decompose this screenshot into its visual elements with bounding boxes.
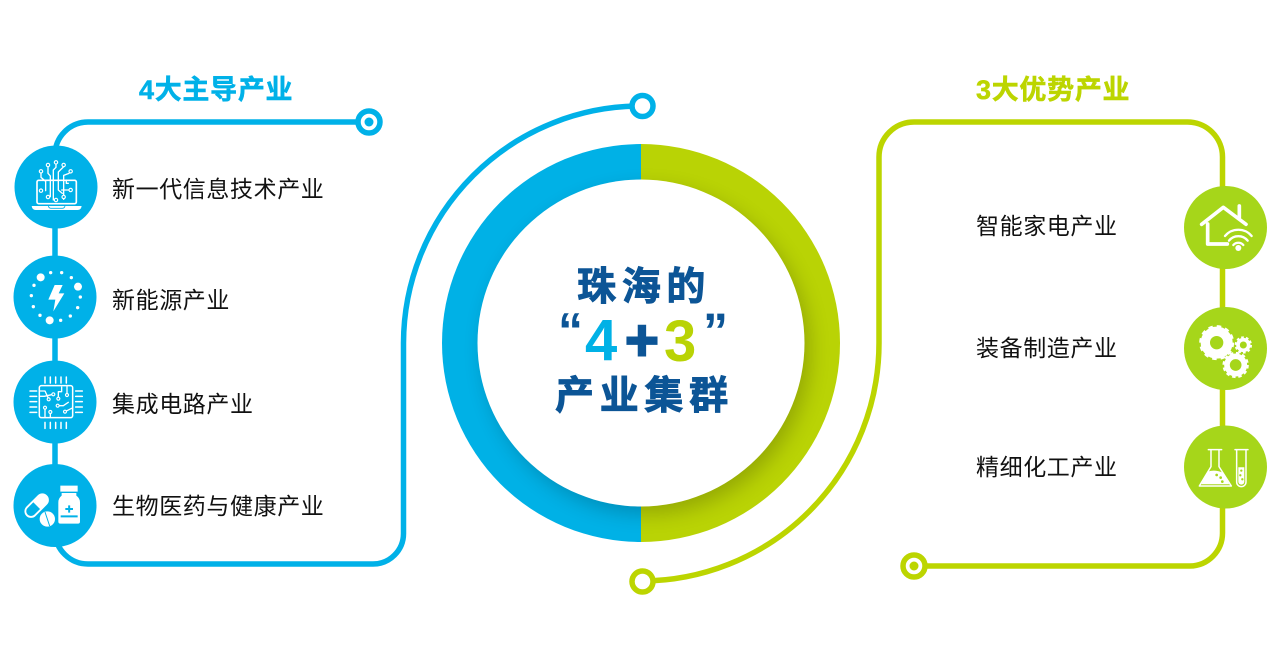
item: 新一代信息技术产业 — [14, 146, 324, 228]
blue half ring — [442, 144, 641, 542]
number 4: 4 — [585, 308, 617, 373]
label: 新能源产业 — [112, 287, 230, 313]
quote open: “ — [558, 303, 583, 359]
number 3: 3 — [664, 309, 696, 374]
label: 生物医药与健康产业 — [112, 493, 324, 519]
icon: energy bolt — [14, 256, 96, 338]
title: 4大主导产业: 4大主导产业 — [139, 75, 293, 105]
line: 珠海的: 珠海的 — [577, 266, 711, 309]
blue connector line — [55, 106, 641, 564]
icon: gears — [1184, 307, 1267, 390]
icon: flask and test tube — [1184, 426, 1267, 508]
item: 新能源产业 — [14, 256, 230, 338]
green ring marker at end of arc — [632, 571, 653, 592]
panel: 4大主导产业 — [14, 75, 653, 564]
green half ring — [641, 144, 840, 542]
plus: + — [625, 308, 659, 373]
item: 集成电路产业 — [14, 360, 254, 444]
label: 集成电路产业 — [112, 391, 254, 417]
item: 精细化工产业 — [976, 426, 1267, 508]
item: 生物医药与健康产业 — [14, 464, 324, 547]
quote close: ” — [703, 303, 728, 359]
center donut — [442, 144, 840, 542]
item: 装备制造产业 — [976, 307, 1267, 390]
icon: laptop with circuit — [14, 146, 98, 228]
label: 精细化工产业 — [976, 454, 1118, 480]
green connector line — [641, 122, 1222, 581]
white inner disc — [478, 180, 804, 506]
icon: smart home — [1184, 186, 1267, 269]
panel: 3大优势产业 — [632, 75, 1267, 592]
center title — [555, 266, 734, 418]
icon: chip — [14, 360, 96, 444]
item: 智能家电产业 — [976, 186, 1267, 269]
green end marker with dot — [903, 555, 925, 577]
line: 产业集群: 产业集群 — [555, 375, 734, 418]
label: 智能家电产业 — [976, 213, 1118, 239]
label: 新一代信息技术产业 — [112, 176, 324, 202]
blue ring marker at top of arc — [632, 96, 653, 116]
inner shadow — [484, 188, 810, 514]
icon: pills and bottle — [14, 464, 96, 547]
title: 3大优势产业: 3大优势产业 — [976, 75, 1130, 105]
blue end marker with dot — [358, 111, 380, 133]
label: 装备制造产业 — [976, 335, 1118, 361]
